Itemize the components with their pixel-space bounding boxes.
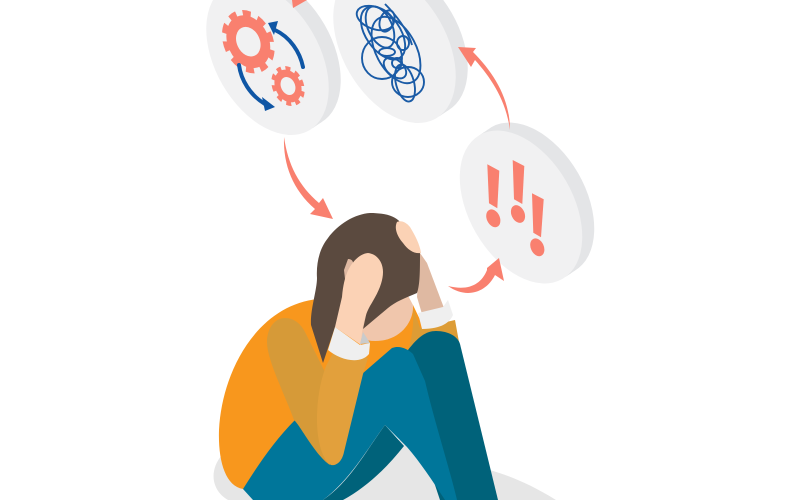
- icon: scribble: [352, 0, 431, 104]
- under thigh shadow: [323, 425, 404, 500]
- disc: exclamation marks: [434, 101, 620, 305]
- disc face: [434, 109, 608, 305]
- arrow: gears to person: [284, 137, 333, 219]
- disc: tangled scribble: [308, 0, 493, 144]
- disc edge: [312, 0, 493, 142]
- forearm: [317, 347, 368, 465]
- far leg: [400, 331, 498, 500]
- raised forearm: [417, 253, 444, 314]
- torso: [219, 299, 425, 489]
- hand on head: [335, 253, 383, 345]
- neck and face: [360, 290, 413, 341]
- fingers on crown: [396, 221, 421, 253]
- person: [219, 213, 498, 500]
- icon: large gear: [216, 6, 280, 77]
- arrow: person to exclamation disc: [448, 258, 504, 293]
- icon: small gear: [268, 64, 308, 108]
- right cuff: [418, 300, 453, 329]
- disc face: [308, 0, 481, 144]
- near leg: [243, 347, 457, 500]
- cuff shadow: [360, 332, 370, 344]
- disc: gears: [181, 0, 366, 156]
- upper arm: [267, 318, 330, 465]
- icon: blue cycle arrows: [239, 21, 303, 111]
- disc edge: [438, 101, 620, 302]
- disc face: [181, 0, 354, 156]
- far sleeve: [408, 308, 459, 372]
- hair: [311, 213, 420, 363]
- floor shadow: [214, 440, 556, 500]
- arrow: top fragment: [292, 0, 307, 8]
- icon: exclamation marks: [483, 160, 547, 258]
- thumb: [344, 259, 353, 288]
- left cuff: [328, 327, 370, 360]
- disc edge: [185, 0, 366, 154]
- arrow: exclamation disc to scribble: [458, 47, 510, 130]
